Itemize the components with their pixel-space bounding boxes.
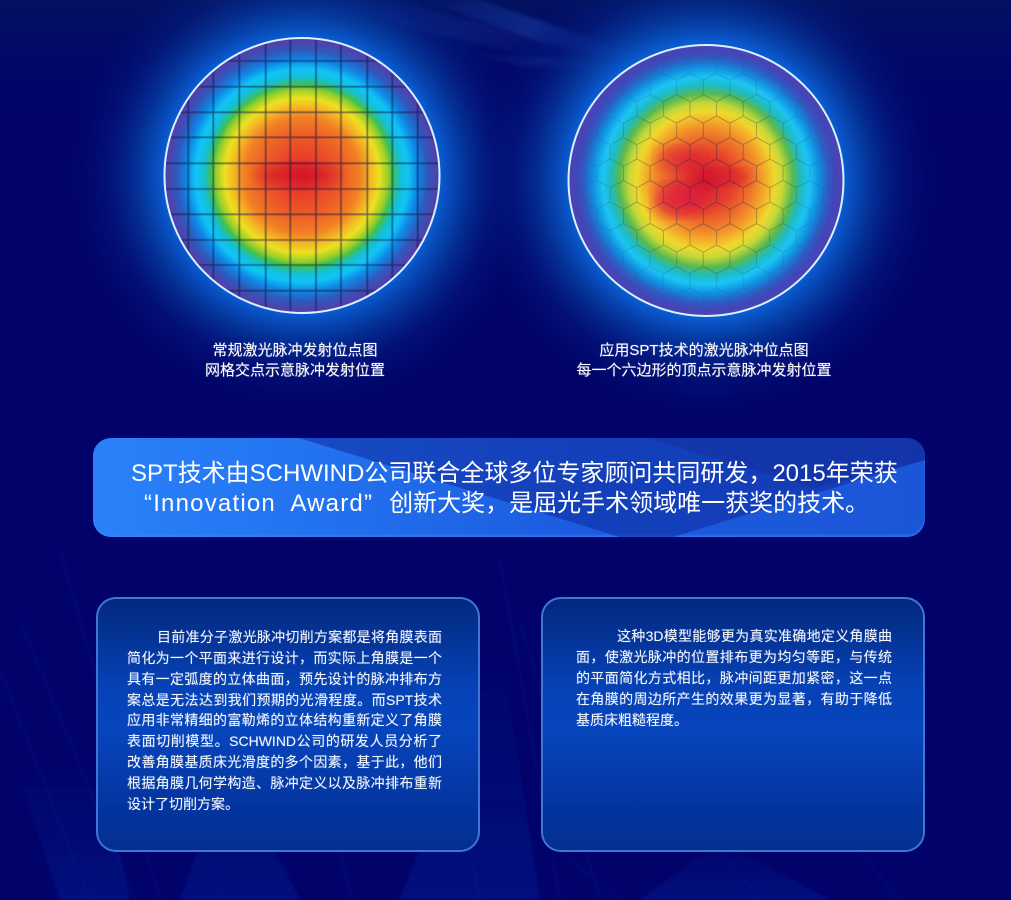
- caption: conventional pattern: 网格交点示意脉冲发射位置: [205, 362, 385, 378]
- caption: conventional pattern: 常规激光脉冲发射位点图: [212, 342, 378, 359]
- panel: left text: 目前准分子激光脉冲切削方案都是将角膜表面: [157, 629, 442, 645]
- panel: right text: [541, 597, 925, 852]
- banner line 1: SPT技术由SCHWIND公司联合全球多位专家顾问共同研发，2015年荣获: [131, 460, 898, 487]
- panel: left text: 案总是无法达到我们预期的光滑程度。而SPT技术: [127, 692, 442, 708]
- caption: SPT pattern: 应用SPT技术的激光脉冲位点图: [599, 342, 809, 359]
- panel: left text: 应用非常精细的富勒烯的立体结构重新定义了角膜: [127, 712, 442, 728]
- panel: right text: 的平面简化方式相比，脉冲间距更加紧密，这一点: [576, 670, 892, 686]
- banner line 2: “Innovation Award” 创新大奖，是屈光手术领域唯一获奖的技术。: [144, 490, 869, 517]
- panel: left text: 根据角膜几何学构造、脉冲定义以及脉冲排布重新: [127, 775, 442, 791]
- panel: left text: 设计了切削方案。: [127, 796, 239, 812]
- panel: left text: 简化为一个平面来进行设计，而实际上角膜是一个: [127, 650, 442, 666]
- panel: left text: [96, 597, 480, 852]
- caption: SPT pattern: [576, 342, 832, 378]
- panel: right text: 面，使激光脉冲的位置排布更为均匀等距，与传统: [576, 649, 892, 665]
- panel: left text: 改善角膜基质床光滑度的多个因素，基于此，他们: [127, 754, 442, 770]
- heatmap: SPT hexagon pattern: [568, 44, 844, 317]
- panel: right text: 在角膜的周边所产生的效果更为显著，有助于降低: [576, 691, 892, 707]
- heatmap: conventional grid pattern: [164, 37, 440, 314]
- panel: left text: 表面切削模型。SCHWIND公司的研发人员分析了: [127, 733, 442, 749]
- panel: left text: 具有一定弧度的立体曲面，预先设计的脉冲排布方: [127, 670, 442, 686]
- panel: right text: 这种3D模型能够更为真实准确地定义角膜曲: [617, 628, 892, 644]
- panel: right text: 基质床粗糙程度。: [576, 712, 688, 728]
- caption: SPT pattern: 每一个六边形的顶点示意脉冲发射位置: [576, 362, 832, 378]
- caption: conventional pattern: [205, 342, 385, 378]
- banner: [93, 438, 925, 537]
